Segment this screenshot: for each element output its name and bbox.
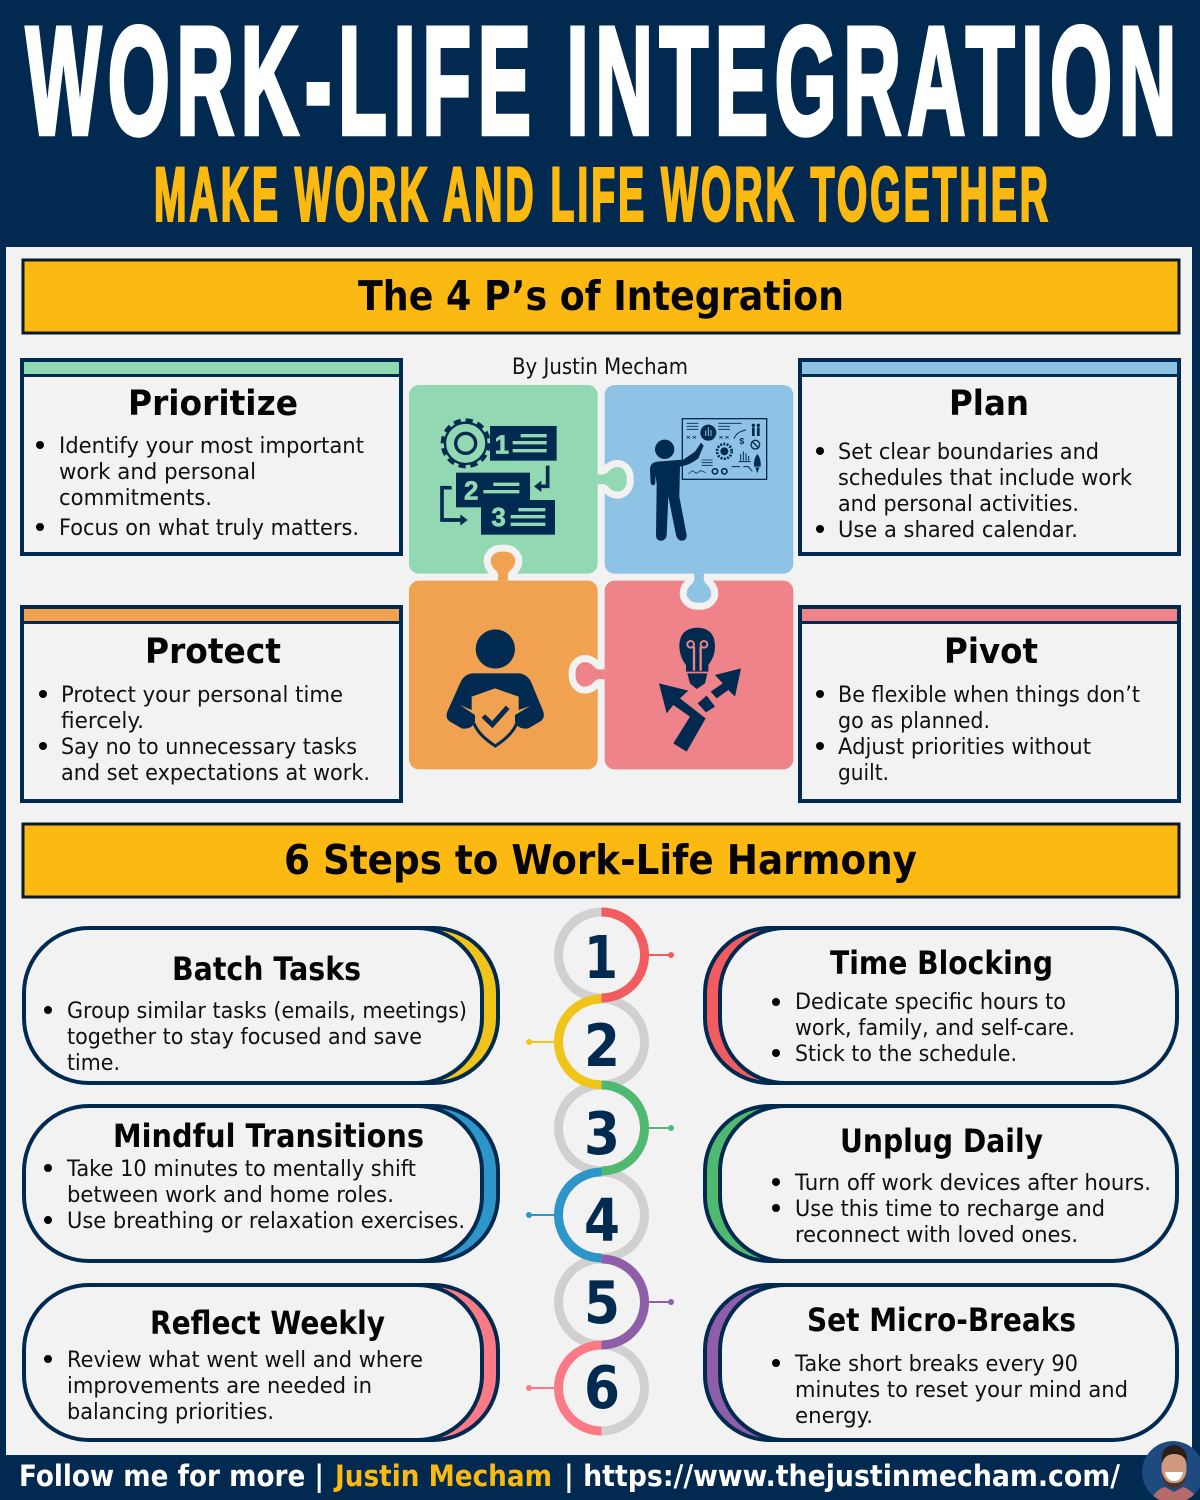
step card: Reflect Weekly: Review what went well and where	[67, 1347, 423, 1373]
numbered step rings	[526, 912, 674, 1431]
step card: Mindful Transitions: Use breathing or relaxation exercises.	[67, 1208, 465, 1234]
step card: Batch Tasks	[24, 928, 498, 1083]
panel: Protect: fiercely.	[61, 708, 144, 734]
numbered step rings: 5	[584, 1268, 620, 1337]
icon: person holding a shield	[447, 629, 544, 746]
panel: Protect: and set expectations at work.	[61, 760, 370, 786]
panel: Protect	[22, 607, 401, 801]
step card: Unplug Daily	[705, 1106, 1177, 1261]
step card: Set Micro-Breaks: Set Micro-Breaks	[807, 1301, 1076, 1339]
step card: Mindful Transitions: Mindful Transitions	[113, 1117, 424, 1155]
footer text	[19, 1459, 1120, 1493]
footer text: | https://www.thejustinmecham.com/	[564, 1459, 1120, 1493]
section heading: 6 Steps to Work-Life Harmony: 6 Steps to Work-Life Harmony	[284, 836, 917, 884]
panel: Plan: Use a shared calendar.	[838, 517, 1078, 543]
panel: Prioritize	[22, 360, 401, 554]
step card: Set Micro-Breaks: energy.	[795, 1403, 873, 1429]
puzzle graphic	[409, 385, 793, 769]
panel: Pivot: guilt.	[838, 760, 889, 786]
section heading: The 4 P's of Integration: The 4 P’s of Integration	[358, 272, 844, 320]
byline: By Justin Mecham	[512, 354, 688, 380]
icon: person presenting at a board: $	[739, 436, 744, 446]
panel: Pivot: Adjust priorities without	[838, 734, 1091, 760]
icon: numbered priority list with gear: 3	[491, 502, 506, 532]
step card: Reflect Weekly: Reflect Weekly	[150, 1304, 385, 1342]
icon: numbered priority list with gear: 1	[495, 429, 509, 459]
step card: Time Blocking: Stick to the schedule.	[795, 1041, 1017, 1067]
author avatar	[1142, 1441, 1200, 1500]
step card: Unplug Daily: Unplug Daily	[840, 1122, 1043, 1160]
step card: Unplug Daily: Turn off work devices after hours.	[794, 1170, 1151, 1196]
step card: Set Micro-Breaks: Take short breaks every 90	[794, 1351, 1078, 1377]
footer text: Follow me for more |	[19, 1459, 324, 1493]
icon: person presenting at a board	[650, 419, 767, 541]
section heading: The 4 P's of Integration	[23, 260, 1179, 333]
icon: numbered priority list with gear	[442, 421, 557, 535]
step card: Reflect Weekly: improvements are needed in	[67, 1373, 372, 1399]
panel: Plan: schedules that include work	[838, 465, 1132, 491]
step card: Unplug Daily: reconnect with loved ones.	[795, 1222, 1078, 1248]
panel: Protect: Protect	[145, 632, 281, 672]
step card: Time Blocking	[705, 928, 1177, 1083]
numbered step rings: 3	[584, 1099, 620, 1168]
step card: Set Micro-Breaks	[705, 1285, 1177, 1440]
step card: Time Blocking: Dedicate specific hours to	[795, 989, 1066, 1015]
step card: Batch Tasks: together to stay focused and save	[67, 1024, 422, 1050]
step card: Reflect Weekly	[24, 1285, 498, 1440]
step card: Reflect Weekly: balancing priorities.	[67, 1399, 274, 1425]
panel: Prioritize: work and personal	[59, 459, 256, 485]
icon: numbered priority list with gear: 2	[464, 475, 478, 505]
panel: Prioritize: commitments.	[59, 485, 212, 511]
step card: Batch Tasks: Group similar tasks (emails, meetings)	[67, 998, 467, 1024]
step card: Batch Tasks: time.	[67, 1050, 120, 1076]
step card: Mindful Transitions	[24, 1106, 498, 1261]
panel: Protect: Say no to unnecessary tasks	[61, 734, 357, 760]
panel: Pivot: Be flexible when things don’t	[838, 682, 1140, 708]
panel: Pivot	[800, 607, 1179, 801]
step card: Batch Tasks: Batch Tasks	[172, 950, 361, 988]
step card: Time Blocking: work, family, and self-care.	[795, 1015, 1075, 1041]
panel: Plan: Set clear boundaries and	[838, 439, 1099, 465]
panel: Pivot: go as planned.	[838, 708, 990, 734]
step card: Mindful Transitions: between work and home roles.	[67, 1182, 394, 1208]
panel: Plan: and personal activities.	[838, 491, 1079, 517]
numbered step rings: 1	[584, 923, 618, 992]
step card: Mindful Transitions: Take 10 minutes to mentally shift	[66, 1156, 416, 1182]
numbered step rings: 4	[584, 1186, 620, 1255]
section heading: 6 Steps to Work-Life Harmony	[23, 824, 1179, 897]
numbered step rings: 6	[584, 1353, 620, 1422]
panel: Prioritize: Prioritize	[128, 384, 298, 424]
panel: Plan: Plan	[949, 384, 1029, 424]
icon: lightbulb with diverging arrows	[659, 628, 741, 752]
step card: Unplug Daily: Use this time to recharge and	[795, 1196, 1105, 1222]
panel: Prioritize: Focus on what truly matters.	[59, 515, 359, 541]
step card: Time Blocking: Time Blocking	[830, 944, 1053, 982]
panel: Plan	[800, 360, 1179, 554]
footer text: Justin Mecham	[333, 1459, 552, 1493]
panel: Protect: Protect your personal time	[61, 682, 343, 708]
numbered step rings: 2	[584, 1011, 620, 1080]
panel: Prioritize: Identify your most important	[59, 433, 364, 459]
step card: Set Micro-Breaks: minutes to reset your mind and	[795, 1377, 1128, 1403]
panel: Pivot: Pivot	[944, 632, 1038, 672]
